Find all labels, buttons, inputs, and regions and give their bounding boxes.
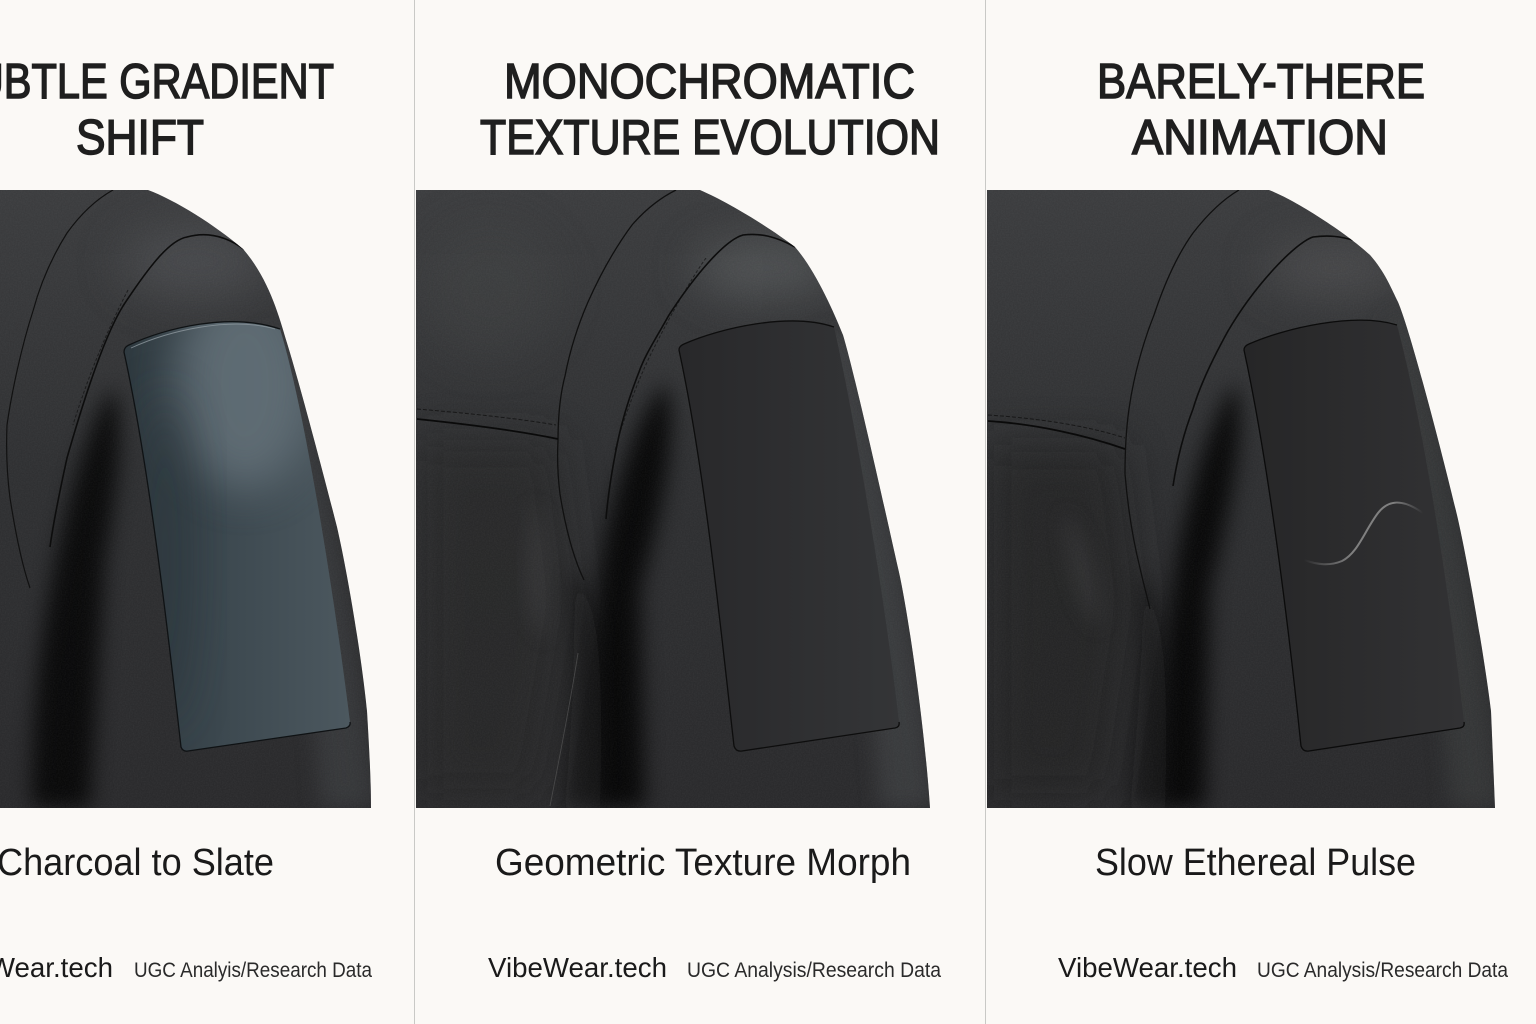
jacket shoulder illustration with pulse patch — [987, 190, 1500, 808]
heading: monochromatic texture evolution — [480, 55, 940, 165]
divider left — [414, 0, 415, 1024]
heading: monochromatic texture evolution: TEXTURE EVOLUTION — [480, 111, 940, 165]
icon: ethereal pulse wave — [1304, 502, 1423, 564]
footer: brand and source: UGC Analyis/Research Data — [134, 958, 372, 982]
heading: monochromatic texture evolution: MONOCHROMATIC — [504, 55, 915, 109]
heading: subtle gradient shift: SHIFT — [76, 111, 204, 165]
heading: subtle gradient shift — [0, 55, 334, 165]
heading: barely-there animation: ANIMATION — [1132, 111, 1388, 165]
panel: barely-there animation — [987, 55, 1508, 983]
footer: brand and source: VibeWear.tech — [488, 952, 667, 983]
jacket shoulder illustration with slate patch — [0, 190, 375, 808]
footer: brand and source: UGC Analysis/Research Data — [687, 958, 941, 982]
panel: subtle gradient shift — [0, 55, 375, 983]
footer: brand and source — [1058, 952, 1508, 983]
jacket shoulder illustration with textured patch — [416, 190, 935, 808]
label: charcoal to slate: Charcoal to Slate — [0, 842, 274, 884]
footer: brand and source — [488, 952, 941, 983]
label: slow ethereal pulse: Slow Ethereal Pulse — [1095, 842, 1416, 884]
divider right — [985, 0, 986, 1024]
heading: barely-there animation — [1097, 55, 1425, 165]
footer: brand and source: VibeWear.tech — [1058, 952, 1237, 983]
label: geometric texture morph: Geometric Texture Morph — [495, 842, 911, 884]
footer: brand and source — [0, 952, 372, 983]
heading: barely-there animation: BARELY-THERE — [1097, 55, 1425, 109]
panel: monochromatic texture evolution — [416, 55, 941, 983]
footer: brand and source: UGC Analysis/Research Data — [1257, 958, 1508, 982]
